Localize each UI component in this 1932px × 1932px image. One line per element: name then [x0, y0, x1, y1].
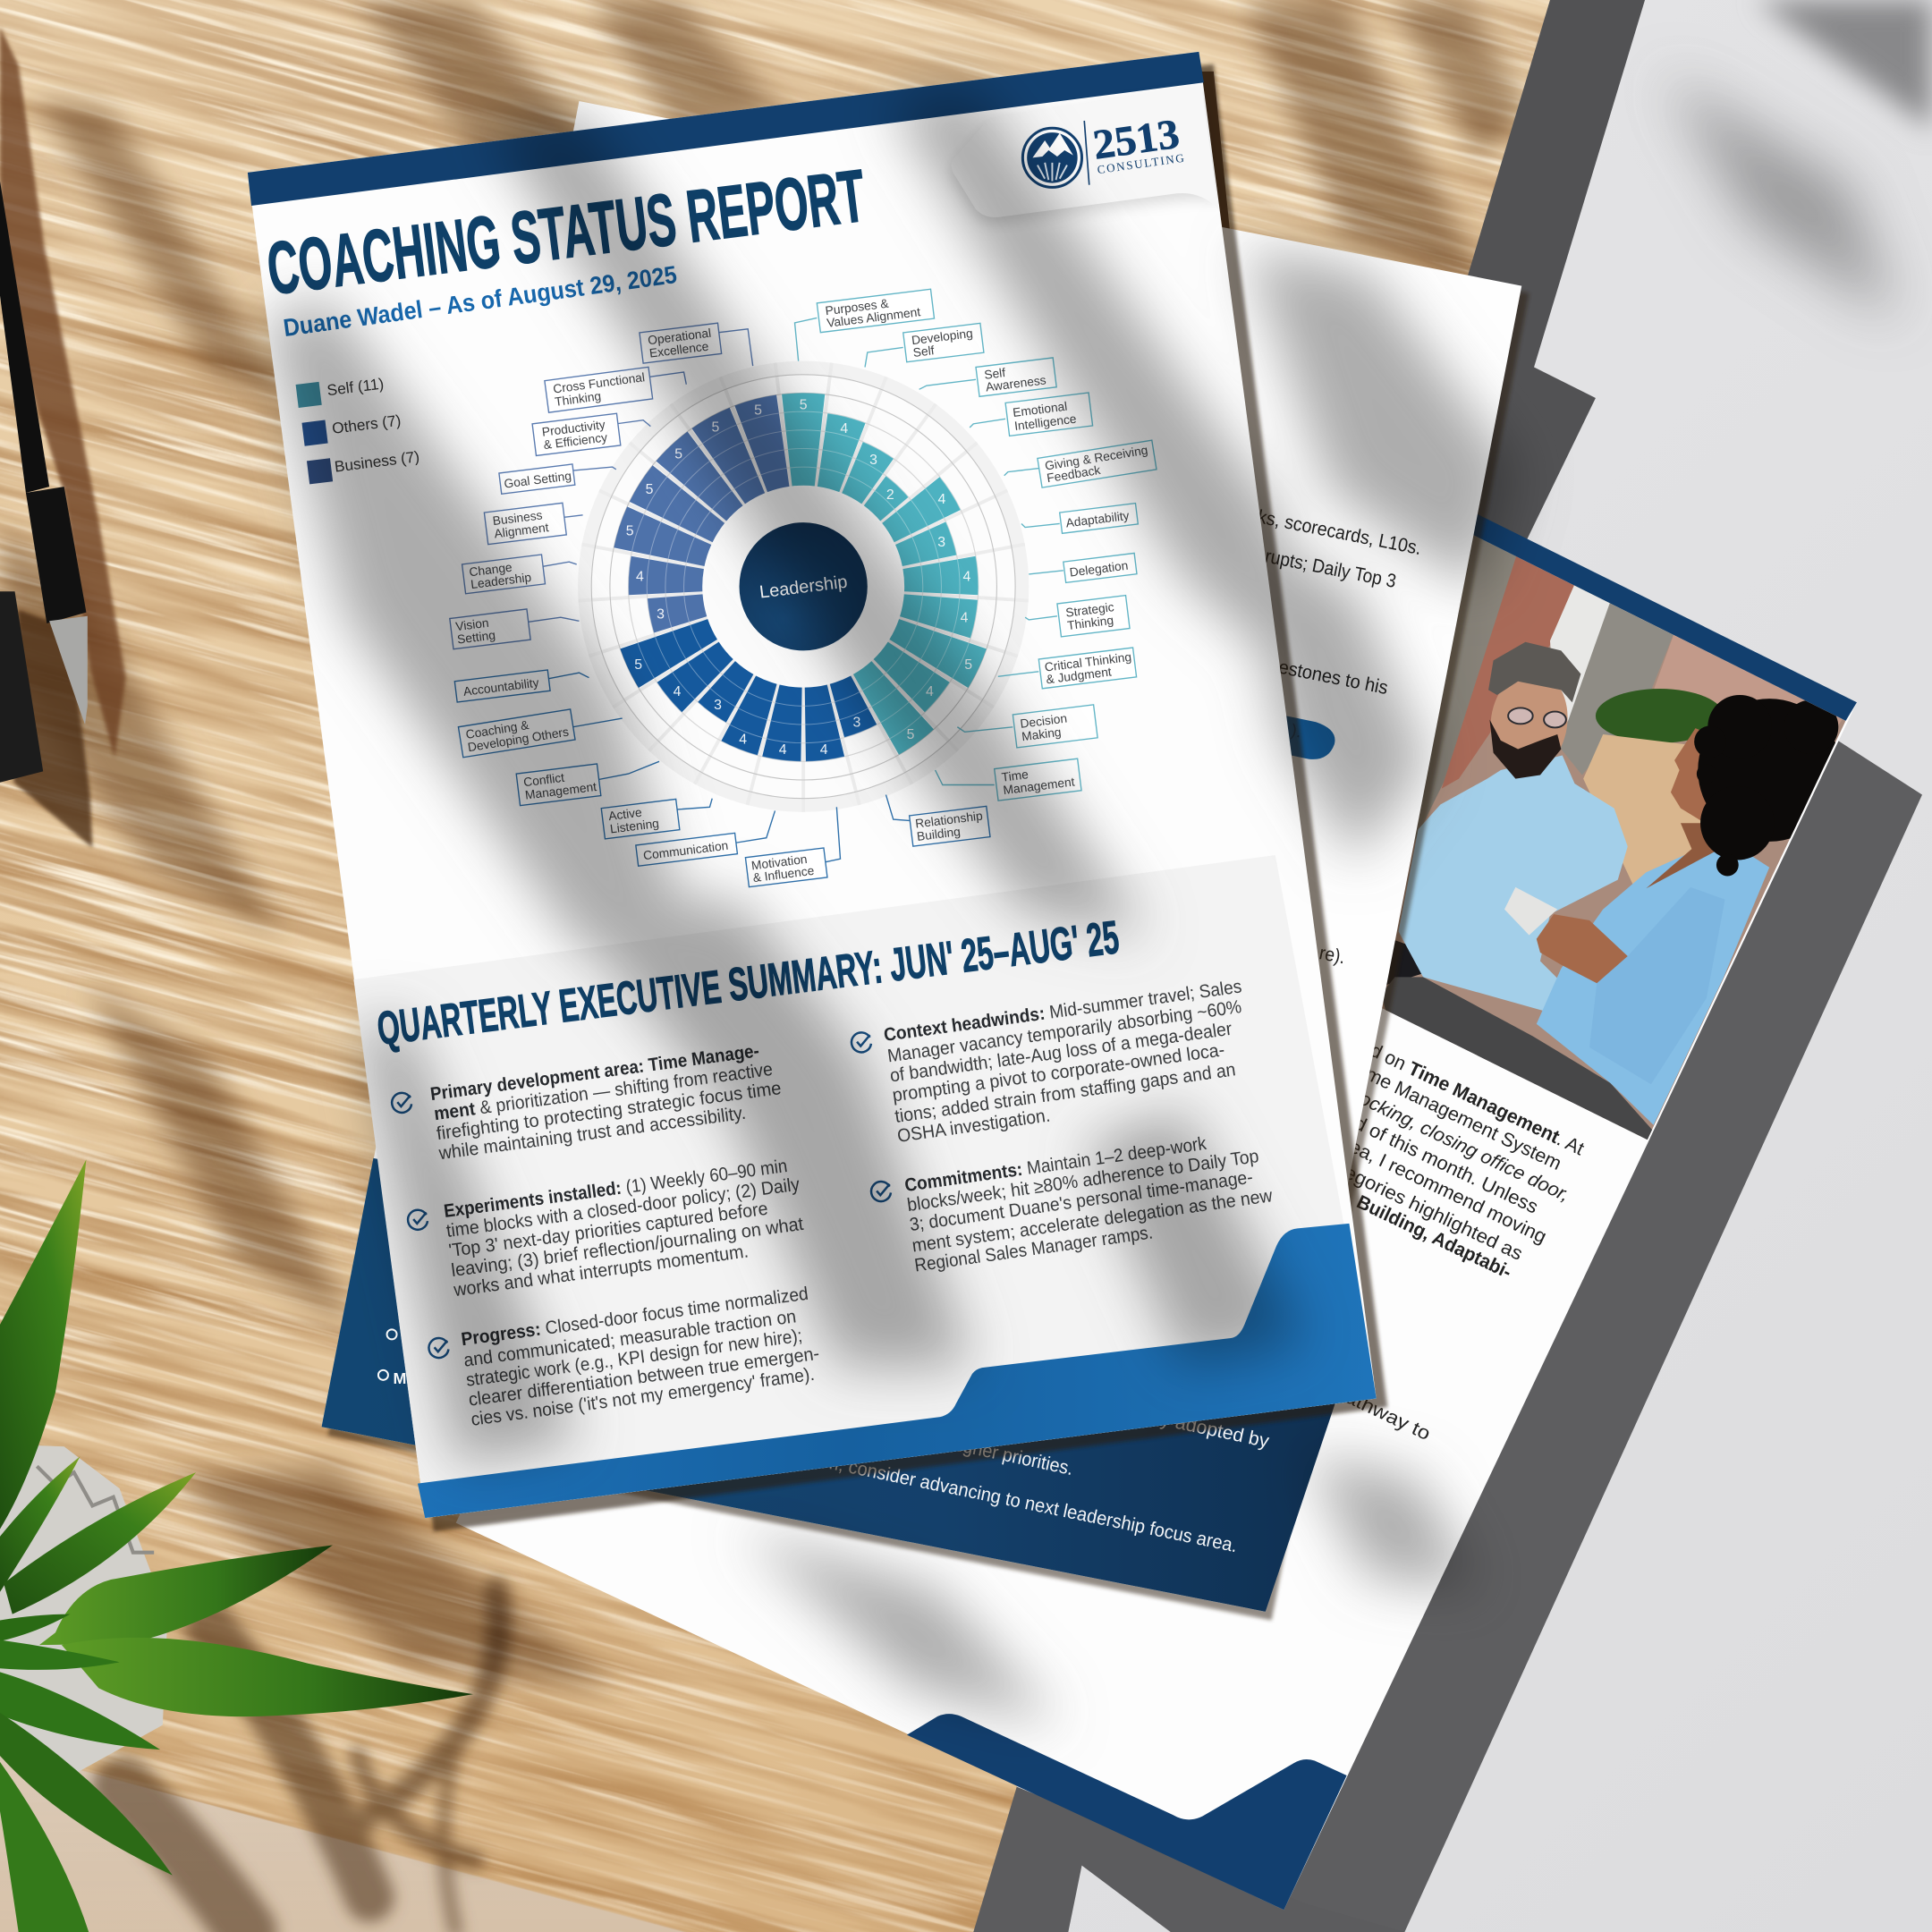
page 3 text: ocking, closing office door, [1356, 1088, 1573, 1206]
summary item: experiments installed: 'Top 3' next-day priorities captured before [447, 1199, 769, 1261]
summary item: context headwinds: of bandwidth; late-Aug loss of a mega-dealer [888, 1019, 1233, 1086]
shadow band: dark strip right of photo page [1233, 740, 1922, 1932]
label: Cross Functional Thinking: Thinking [554, 389, 602, 409]
pen [0, 181, 88, 783]
plant pot [0, 1445, 167, 1775]
label: Giving & Receiving Feedback: Giving & Receiving [1044, 444, 1148, 473]
page 2 footer text: m, consider advancing to next leadership focus area. [822, 1451, 1240, 1556]
legend: Self (11) [326, 375, 385, 399]
brown shadow behind sheet corner [1195, 72, 1230, 234]
label boxes: Self [817, 289, 1157, 801]
wheel grid rings [591, 375, 1015, 799]
label: Adaptability [1060, 504, 1138, 533]
label: Giving & Receiving Feedback [1038, 440, 1157, 487]
label boxes: Business [450, 323, 722, 649]
score labels: 5 [964, 657, 972, 673]
label: Motivation & Influence: Motivation [750, 852, 808, 872]
label: Productivity & Efficiency: & Efficiency [543, 430, 608, 452]
label: Operational Excellence: Excellence [648, 340, 709, 360]
label: Productivity & Efficiency [532, 413, 621, 455]
score labels: 4 [926, 684, 934, 699]
score labels: 3 [657, 607, 665, 623]
leaf: left mid [0, 1640, 120, 1670]
logo emblem [1022, 128, 1081, 187]
page 3 text: pathway to [1331, 1381, 1434, 1445]
summary item: experiments installed: time blocks with a closed-door policy; (2) Daily [445, 1174, 801, 1241]
page 3 text: me Management System [1362, 1063, 1564, 1174]
score labels: 4 [961, 611, 969, 626]
label: Emotional Intelligence [1005, 393, 1093, 436]
shadow: top right corner [1756, 0, 1932, 130]
label: Self Awareness: Awareness [985, 373, 1046, 394]
summary item: primary development area: firefighting to protecting strategic focus time [436, 1078, 783, 1144]
photo: woman's sleeve [1589, 887, 1725, 1084]
label: Vision Setting: Vision [455, 616, 489, 633]
label: Decision Making: Making [1021, 725, 1062, 743]
label: Strategic Thinking: Thinking [1066, 614, 1114, 632]
page 2 text: rupts; Daily Top 3 [1263, 546, 1398, 592]
label: Conflict Management: Conflict [522, 771, 565, 789]
label: Vision Setting: Setting [456, 628, 496, 647]
page 2 shadow [327, 108, 1530, 1620]
label: Conflict Management: Management [524, 780, 597, 802]
label: Change Leadership: Change [469, 561, 513, 579]
shadow band: dark area below photo page [961, 1775, 1404, 1932]
logo sub wordmark: CONSULTING [1097, 151, 1185, 176]
summary item: progress: Progress: Closed-door focus time normalized [460, 1284, 809, 1350]
summary item: commitments: blocks/week; hit ≥80% adherence to Daily Top [906, 1146, 1260, 1216]
label: Strategic Thinking: Strategic [1065, 600, 1114, 620]
label: Relationship Building: Relationship [914, 809, 984, 831]
check icon [392, 1093, 411, 1113]
pot zigzag texture [37, 1466, 154, 1553]
summary item: context headwinds: Context headwinds: Mid-summer travel; Sales [883, 976, 1243, 1046]
label: Adaptability: Adaptability [1065, 509, 1130, 530]
sheet body [248, 52, 1377, 1518]
summary item: commitments: Regional Sales Manager ramps. [913, 1222, 1154, 1276]
photo: hand and arm [1537, 914, 1628, 983]
label: Purposes & Values Alignment: Values Alignment [826, 305, 921, 330]
Self segments [782, 393, 987, 756]
grid rings over segments [629, 411, 979, 761]
page 2: middle sheet [322, 101, 1530, 1620]
wheel centre label: Leadership [758, 572, 849, 603]
photo: coffee cup [1504, 887, 1557, 936]
label: Accountability: Accountability [462, 676, 539, 699]
logo divider [1084, 121, 1089, 185]
section heading: QUARTERLY EXECUTIVE SUMMARY: JUN' 25–AUG' 25 [375, 911, 1122, 1055]
page 2 footer text: M [393, 1369, 406, 1387]
label: Goal Setting [499, 464, 575, 494]
legend: Others (7) [331, 411, 402, 437]
label: Cross Functional Thinking [545, 367, 653, 412]
label: Operational Excellence [640, 323, 722, 363]
label: Time Management: Time [1001, 767, 1030, 784]
legend: Business (7) [334, 447, 420, 476]
label: Conflict Management [516, 764, 601, 806]
label: Critical Thinking & Judgment [1038, 648, 1137, 689]
pen box shadow [13, 610, 92, 848]
page 3 text [1331, 1039, 1588, 1445]
label: Active Listening: Listening [609, 817, 660, 836]
pen shadow [0, 27, 126, 758]
summary item: progress: cies vs. noise ('it's not my emergency' frame). [470, 1364, 816, 1430]
wheel centre circle [740, 522, 868, 650]
label boxes: Others [454, 670, 990, 887]
shadow band: dark strip beside wood (top) [1417, 0, 1645, 690]
label: Motivation & Influence: & Influence [752, 864, 815, 885]
photo: man's hair [1488, 642, 1580, 702]
wheel hub [705, 488, 902, 685]
leaf: small upper [0, 1456, 80, 1592]
summary item: experiments installed: leaving; (3) brief reflection/journaling on what [450, 1214, 805, 1281]
score labels: 5 [634, 657, 642, 673]
label: Relationship Building: Building [916, 825, 962, 843]
score labels [626, 397, 972, 758]
photo: woman's blouse [1537, 843, 1769, 1125]
page 2 dark footer [322, 1158, 1355, 1612]
sheet top band [248, 52, 1204, 206]
label: Coaching & Developing Others: Coaching & [465, 718, 530, 741]
page 3 text: d of this month. Unless [1351, 1112, 1541, 1218]
page 3 text: Building, Adaptabi- [1353, 1191, 1515, 1283]
score labels: 5 [800, 397, 808, 412]
legend [296, 375, 420, 484]
label: Vision Setting [450, 609, 530, 649]
summary item: context headwinds: OSHA investigation. [896, 1105, 1051, 1147]
page 2 text: estones to his [1277, 657, 1390, 699]
label: Time Management: Management [1003, 775, 1075, 797]
page 3 top band [1409, 484, 1857, 721]
label: Critical Thinking & Judgment: & Judgment [1046, 665, 1113, 686]
photo: shrub [1596, 689, 1724, 743]
label: Developing Self [903, 323, 984, 362]
score labels: 5 [712, 420, 720, 436]
photo: woman's neck [1646, 823, 1731, 888]
label: Productivity & Efficiency: Productivity [541, 418, 606, 439]
page 3 bottom dark tab [907, 1714, 1347, 1910]
page 3 sheet [456, 316, 1857, 1910]
Others segments [619, 610, 877, 763]
score labels: 5 [754, 403, 762, 419]
pen grip [26, 487, 86, 623]
label: Time Management [995, 758, 1081, 801]
label: Self Awareness: Self [984, 366, 1006, 382]
leaf: bottom [0, 1762, 89, 1932]
label: Cross Functional Thinking: Cross Functional [552, 370, 646, 396]
label: Active Listening: Active [607, 806, 643, 823]
score labels: 3 [869, 453, 877, 468]
leaf: bottom right [0, 1713, 173, 1876]
label: Purposes & Values Alignment [817, 289, 935, 333]
logo wordmark: 2513 [1090, 111, 1182, 169]
leaf: upper right [4, 1472, 196, 1614]
subtitle: Duane Wadel – As of August 29, 2025 [282, 260, 678, 342]
summary item: progress [460, 1284, 820, 1430]
page 2 footer text: higher priorities. [948, 1432, 1075, 1479]
label: Accountability [454, 670, 550, 702]
executive summary panel [353, 855, 1377, 1518]
leaf: mid right [39, 1545, 333, 1645]
photo: woman's trousers [1381, 977, 1652, 1146]
leaf: tall [0, 1159, 86, 1530]
label: Critical Thinking & Judgment: Critical Thinking [1044, 650, 1132, 674]
score labels: 4 [937, 492, 945, 507]
score labels: 3 [714, 698, 722, 713]
summary item: experiments installed: Experiments installed: (1) Weekly 60–90 min [443, 1156, 789, 1222]
label: Developing Self: Self [912, 343, 935, 360]
photo: man's head [1484, 665, 1574, 778]
check icon [428, 1338, 448, 1358]
label: Self Awareness [976, 358, 1056, 396]
summary item: experiments installed: works and what interrupts momentum. [452, 1241, 750, 1301]
photo: woman's face [1671, 728, 1724, 826]
summary item: context headwinds: prompting a pivot to corporate-owned loca- [891, 1039, 1226, 1106]
summary item: commitments [903, 1133, 1274, 1276]
page 2 text: re). [1318, 942, 1347, 968]
check icon [852, 1032, 871, 1052]
label: Emotional Intelligence: Intelligence [1013, 412, 1078, 433]
score labels: 4 [840, 421, 848, 436]
label: Operational Excellence: Operational [647, 326, 712, 347]
label: Active Listening [601, 799, 680, 839]
label: Strategic Thinking [1057, 596, 1130, 637]
check icon [408, 1210, 428, 1230]
score labels: 3 [853, 715, 861, 730]
pen barrel [0, 181, 49, 493]
score labels: 4 [963, 570, 971, 585]
summary item: commitments: Commitments: Maintain 1–2 deep-work [903, 1133, 1208, 1196]
summary item: primary development area [429, 1040, 783, 1164]
leaf: small left [0, 1614, 71, 1641]
page 2 text [1256, 505, 1423, 968]
summary item: primary development area: ment & prioritization — shifting from reactive [433, 1059, 774, 1124]
photo: two colleagues talking [1382, 535, 1846, 1140]
photo: woman's hair [1694, 695, 1841, 876]
label: Goal Setting: Goal Setting [504, 469, 572, 491]
label: Delegation: Delegation [1069, 559, 1129, 580]
photo: glasses [1508, 708, 1566, 727]
plant leaves [0, 1159, 473, 1932]
label: Relationship Building [910, 806, 990, 846]
label: Emotional Intelligence: Emotional [1012, 400, 1068, 419]
radial leadership wheel chart [578, 361, 1029, 812]
page 2 text: ). [1289, 722, 1303, 742]
Business segments [613, 394, 800, 633]
light and shadow stripes over the paper [265, 74, 1897, 1725]
label: Communication [636, 833, 737, 866]
page 3 text: d on Time Management. At [1367, 1039, 1588, 1159]
photo: man's beard [1489, 719, 1561, 779]
page 2 footer text: adly adopted by [1134, 1402, 1271, 1452]
check icon [871, 1182, 891, 1201]
page 3: photo page [456, 514, 1857, 1911]
summary item: experiments installed [443, 1156, 805, 1301]
page 2 text: ks, scorecards, L10s. [1256, 505, 1423, 559]
score labels: 5 [907, 727, 915, 742]
label: Motivation & Influence [745, 848, 827, 887]
label: Business Alignment: Alignment [494, 521, 549, 540]
score labels: 5 [674, 447, 682, 462]
summary item: progress: clearer differentiation between true emergen- [467, 1343, 820, 1411]
page 2 sheet [322, 101, 1521, 1612]
photo: planter [1583, 734, 1707, 897]
page 3 text: egories highlighted as [1341, 1161, 1526, 1265]
score labels: 5 [646, 482, 654, 497]
shadow stripes on wood [0, 0, 1528, 1688]
title: COACHING STATUS REPORT [263, 154, 869, 310]
summary item: primary development area: while maintaining trust and accessibility. [436, 1103, 747, 1164]
leaf: long right [62, 1638, 473, 1716]
summary item: progress: and communicated; measurable traction on [462, 1306, 797, 1371]
score labels: 4 [779, 742, 787, 758]
score labels: 2 [886, 487, 894, 503]
label: Communication: Communication [642, 839, 729, 862]
photo: man's dark legs [1355, 939, 1455, 986]
label: Delegation [1063, 553, 1137, 582]
summary item: context headwinds [883, 976, 1243, 1147]
summary item: context headwinds: tions; added strain from staffing gaps and an [894, 1059, 1237, 1127]
score labels: 3 [937, 535, 945, 550]
label: Business Alignment [484, 503, 566, 545]
label: Developing Self: Developing [911, 326, 973, 347]
wheel track [578, 361, 1029, 812]
label: Change Leadership [462, 555, 545, 594]
score labels: 4 [636, 570, 644, 585]
label: Decision Making: Decision [1020, 712, 1068, 731]
label: Decision Making [1013, 705, 1097, 748]
main sheet cast shadow [258, 64, 1387, 1531]
summary item: commitments: 3; document Duane's personal time-manage- [909, 1166, 1254, 1235]
score labels: 4 [674, 684, 682, 699]
label: Business Alignment: Business [492, 508, 543, 528]
label: Coaching & Developing Others: Developing Others [467, 725, 570, 754]
leaf: lower [0, 1672, 160, 1750]
pen tip [49, 616, 88, 724]
label: Coaching & Developing Others [458, 709, 575, 758]
score labels: 5 [626, 523, 634, 538]
label: Purposes & Values Alignment: Purposes & [825, 297, 889, 318]
summary item: context headwinds: Manager vacancy temporarily absorbing ~60% [886, 996, 1243, 1066]
label: Giving & Receiving Feedback: Feedback [1046, 463, 1101, 485]
logo tab [951, 85, 1218, 224]
connector lines [526, 318, 1063, 862]
page 2 footer text [378, 1329, 1271, 1556]
summary item: primary development area: Primary development area: Time Manage- [429, 1040, 760, 1105]
pen box object [0, 591, 43, 783]
wheel spokes [579, 363, 1029, 812]
summary item: progress: strategic work (e.g., KPI design for new hire); [465, 1326, 803, 1391]
summary item: commitments: ment system; accelerate delegation as the new [911, 1185, 1274, 1257]
label: Change Leadership: Leadership [470, 571, 532, 591]
page 3 text: ea, I recommend moving [1346, 1135, 1550, 1248]
main sheet: coaching status report [248, 52, 1377, 1518]
plant shadow on wood [123, 1589, 499, 1932]
score labels: 4 [820, 742, 828, 758]
photo: man's shirt [1399, 755, 1628, 1012]
blue footer shape [418, 1224, 1377, 1518]
page 2 pill [1238, 708, 1335, 759]
score labels: 4 [739, 733, 747, 748]
